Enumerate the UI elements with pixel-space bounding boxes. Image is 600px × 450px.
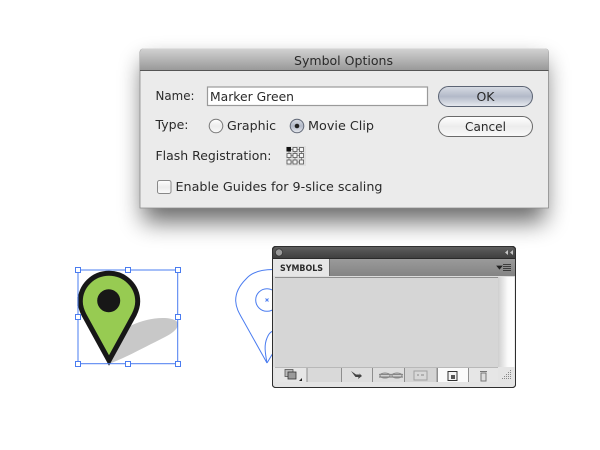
type radio buttons: Movie Clip	[308, 118, 374, 133]
symbols panel	[272, 246, 516, 388]
selected green map marker	[76, 268, 180, 366]
flash registration: Flash Registration:	[156, 148, 272, 163]
Cancel button: Cancel	[465, 119, 506, 134]
panel toolbar	[273, 367, 515, 387]
selection box with handles	[76, 268, 180, 366]
Cancel button	[438, 116, 532, 136]
panel scrollbar	[498, 277, 514, 367]
9-slice checkbox: Enable Guides for 9-slice scaling	[176, 179, 382, 194]
panel content area	[275, 277, 498, 367]
panel tab strip: SYMBOLS	[280, 264, 323, 274]
dialog title bar: Symbol Options	[294, 53, 393, 68]
marker pin	[80, 273, 138, 360]
panel tab strip	[273, 259, 515, 277]
panel title bar	[272, 246, 516, 258]
flash registration	[156, 146, 306, 166]
marker outline guide	[236, 270, 278, 363]
toolbar icons	[285, 370, 487, 381]
type radio buttons: Type:	[154, 118, 188, 132]
name field: Marker Green	[210, 89, 294, 104]
marker shadow	[109, 318, 178, 364]
type radio buttons: Graphic	[227, 118, 276, 133]
name field: Name:	[156, 89, 194, 103]
resize grip	[502, 370, 511, 379]
type radio buttons	[154, 118, 374, 133]
dialog title bar	[140, 48, 548, 71]
name field	[156, 87, 428, 106]
OK button	[438, 86, 532, 106]
OK button: OK	[476, 89, 495, 104]
dialog: Symbol Options	[140, 48, 548, 222]
